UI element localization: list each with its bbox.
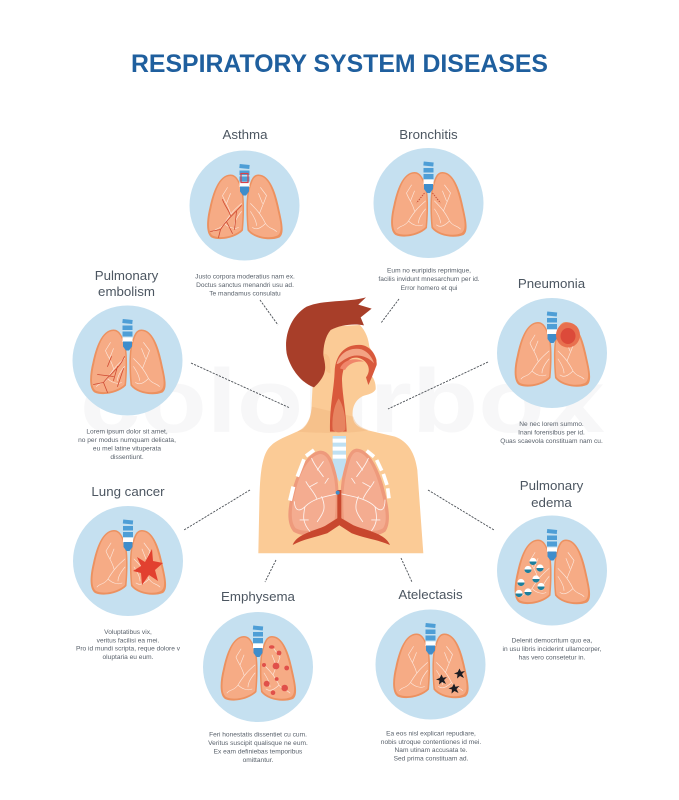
text: asthma: Justo corpora moderatius nam ex. [195, 274, 295, 280]
heading: pulmonary embolism: Pulmonary [95, 268, 159, 283]
panel: emphysema [203, 589, 313, 764]
ribs [290, 450, 389, 501]
text: embolism: dissentiunt. [110, 454, 144, 461]
text: lung cancer: oluptaria eu eum. [103, 654, 154, 661]
text: edema: has vero consetetur in. [519, 654, 586, 662]
panel: lung cancer [73, 484, 183, 661]
text: emphysema: Veritus suscipit qualisque ne eum. [208, 740, 308, 747]
text: pneumonia: Inani forensibus per id. [518, 430, 585, 436]
icon: pneumonia lungs [497, 298, 607, 408]
text: pneumonia: Ne nec lorem summo. [519, 421, 584, 428]
icon: embolism lungs [72, 306, 182, 416]
text: atelectasis: Nam utinam accusata te. [395, 747, 468, 754]
icon: atelectasis lungs [376, 610, 486, 720]
heading: pulmonary embolism: embolism [98, 284, 155, 299]
heading: pulmonary edema: edema [531, 495, 572, 510]
text: emphysema: omittantur. [243, 757, 274, 764]
text: lung cancer: Pro id mundi scripta, reque dolore v [76, 646, 181, 652]
text: bronchitis: Error homero et qui [401, 285, 458, 292]
heading: bronchitis: Bronchitis [399, 127, 458, 142]
text: emphysema: Ex eam definiebas temporibus [214, 748, 303, 756]
neck shadow [297, 407, 368, 433]
title: RESPIRATORY SYSTEM DISEASES [131, 50, 548, 78]
icon: asthma lungs [190, 150, 300, 260]
diaphragm [293, 490, 390, 545]
heading: atelectasis: Atelectasis [398, 587, 463, 602]
watermark: colourbox [80, 352, 605, 452]
hair [286, 297, 372, 387]
panel: asthma [190, 127, 300, 298]
body silhouette [258, 325, 423, 553]
text: embolism: Lorem ipsum dolor sit amet, [86, 428, 168, 436]
icon: bronchitis lungs [374, 148, 484, 258]
panel: pneumonia [497, 276, 607, 445]
heading: pneumonia: Pneumonia [518, 276, 586, 291]
text: emphysema: Feri honestatis dissentiet cu cum. [209, 732, 307, 738]
text: atelectasis: Ea eos nisl explicari repudiare, [386, 730, 476, 738]
airway: nasal cavity and pharynx [330, 345, 377, 432]
text: atelectasis: Sed prima constituam ad. [394, 756, 469, 762]
heading: emphysema: Emphysema [221, 589, 296, 604]
text: embolism: eu mel latine vituperata [93, 446, 161, 452]
text: asthma: Te mandamus consulatu [209, 290, 281, 298]
icon: edema lungs [497, 516, 607, 626]
heading: pulmonary edema: Pulmonary [520, 478, 584, 493]
lungs [288, 449, 389, 535]
panel: pulmonary embolism [72, 268, 182, 461]
text: pneumonia: Quas scaevola constituam nam cu. [500, 438, 603, 445]
heading: lung cancer: Lung cancer [91, 484, 165, 499]
text: embolism: no per modus numquam delicata, [78, 437, 176, 444]
trachea [333, 436, 346, 482]
text: atelectasis: nobis utroque contentiones id mei. [381, 739, 481, 746]
icon: lung cancer lungs [73, 506, 183, 616]
connector lines [184, 299, 494, 582]
text: lung cancer: Voluptatibus vix, [104, 629, 152, 636]
text: lung cancer: veritus facilisi ea mei. [97, 638, 159, 644]
ear [320, 354, 331, 373]
text: edema: in usu libris inciderint ullamcorper, [503, 646, 602, 653]
central figure [258, 297, 423, 553]
icon: emphysema lungs [203, 612, 313, 722]
panel: pulmonary edema [497, 478, 607, 662]
text: bronchitis: Eum no euripidis reprimique, [387, 268, 471, 274]
text: asthma: Doctus sanctus menandri usu ad. [196, 282, 294, 289]
heading: asthma: Asthma [222, 127, 268, 142]
text: bronchitis: facilis invidunt mnesarchum per id. [378, 276, 480, 283]
text: edema: Delenit democritum quo ea, [512, 638, 592, 644]
panel: bronchitis [374, 127, 484, 292]
panel: atelectasis [376, 587, 486, 762]
